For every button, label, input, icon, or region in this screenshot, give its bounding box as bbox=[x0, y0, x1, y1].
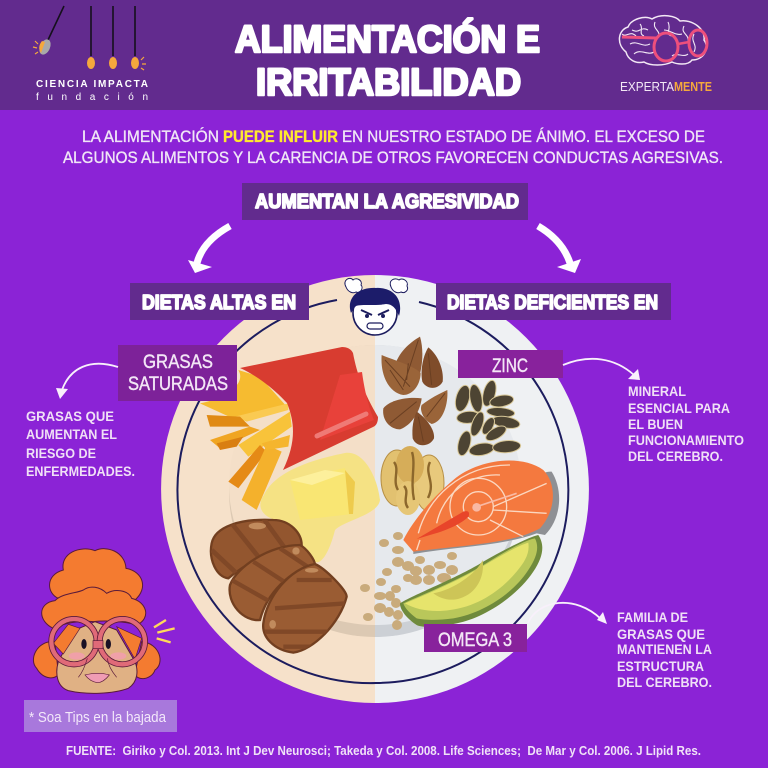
text: grasas: AUMENTAN EL bbox=[26, 426, 117, 442]
logo: Expertamente bbox=[619, 16, 712, 94]
logo: Expertamente: EXPERTA bbox=[620, 79, 674, 94]
intro text: PUEDE INFLUIR bbox=[223, 127, 338, 146]
label: dietas altas en: DIETAS ALTAS EN bbox=[142, 292, 296, 314]
food: fries bbox=[200, 370, 292, 510]
intro text: EN NUESTRO ESTADO DE ÁNIMO. EL EXCESO DE bbox=[342, 127, 705, 146]
text: grasas: RIESGO DE bbox=[26, 445, 96, 461]
arrow: left bbox=[188, 226, 230, 273]
logo: Ciencia Impacta bbox=[33, 6, 148, 103]
logo: Expertamente: MENTE bbox=[674, 79, 712, 94]
intro text: LA ALIMENTACIÓN bbox=[82, 127, 219, 146]
icon: angry face bbox=[345, 278, 408, 335]
text: omega: MANTIENEN LA bbox=[617, 641, 712, 657]
text: zinc: ESENCIAL PARA bbox=[628, 400, 730, 416]
label: zinc bbox=[458, 350, 563, 378]
label: dietas altas en bbox=[130, 283, 309, 320]
food: lentils bbox=[360, 532, 458, 630]
text: zinc: DEL CEREBRO. bbox=[628, 448, 723, 464]
text: zinc: FUNCIONAMIENTO bbox=[628, 432, 744, 448]
label: omega 3 bbox=[424, 624, 527, 652]
title: ALIMENTACIÓN E bbox=[235, 17, 540, 61]
note: soa tips: * Soa Tips en la bajada bbox=[29, 709, 167, 726]
arrow: omega callout bbox=[528, 603, 607, 624]
character: grandmother bbox=[33, 549, 175, 693]
label: zinc: ZINC bbox=[492, 356, 528, 377]
arrow: right bbox=[538, 226, 581, 273]
label: aumentan la agresividad: AUMENTAN LA AGRESIVIDAD bbox=[255, 191, 519, 213]
food: salmon bbox=[403, 461, 559, 554]
title bbox=[235, 17, 540, 104]
text: omega bbox=[617, 609, 712, 690]
food: avocado bbox=[400, 535, 542, 627]
arrow: zinc callout bbox=[563, 359, 640, 380]
label: grasas saturadas bbox=[118, 345, 237, 401]
text: grasas: ENFERMEDADES. bbox=[26, 463, 135, 479]
label: grasas saturadas: SATURADAS bbox=[128, 374, 228, 395]
text: zinc bbox=[628, 383, 744, 464]
text: omega: FAMILIA DE bbox=[617, 609, 688, 625]
food: walnut bbox=[381, 446, 444, 515]
label: aumentan la agresividad bbox=[242, 183, 528, 220]
logo: Ciencia Impacta: fundación bbox=[36, 92, 148, 103]
food: french fries red box bbox=[240, 347, 378, 470]
label: grasas saturadas: GRASAS bbox=[143, 352, 213, 373]
note: soa tips bbox=[24, 700, 177, 732]
food: seeds bbox=[453, 379, 521, 457]
text: omega: DEL CEREBRO. bbox=[617, 674, 712, 690]
text: grasas bbox=[26, 408, 135, 479]
logo: Ciencia Impacta: CIENCIA IMPACTA bbox=[36, 79, 148, 90]
food: steak bbox=[211, 518, 347, 653]
text: zinc: MINERAL bbox=[628, 383, 686, 399]
source footer: FUENTE: Giriko y Col. 2013. Int J Dev Neurosci; Takeda y Col. 2008. Life Sciences; De Mar y Col. 2006. J Lipid Res. bbox=[66, 743, 701, 758]
label: dietas deficientes en: DIETAS DEFICIENTES EN bbox=[447, 292, 658, 314]
text: zinc: EL BUEN bbox=[628, 416, 683, 432]
text: omega: GRASAS QUE bbox=[617, 626, 705, 642]
text: omega: ESTRUCTURA bbox=[617, 658, 704, 674]
label: dietas deficientes en bbox=[436, 283, 671, 320]
text: grasas: GRASAS QUE bbox=[26, 408, 114, 424]
label: omega 3: OMEGA 3 bbox=[438, 630, 512, 651]
intro text bbox=[63, 127, 723, 167]
food: almonds bbox=[381, 337, 447, 445]
header band bbox=[0, 0, 768, 110]
plate bbox=[161, 275, 589, 703]
food: butter bbox=[260, 453, 380, 562]
title: IRRITABILIDAD bbox=[256, 62, 521, 104]
arrow: grasas callout bbox=[56, 364, 118, 399]
